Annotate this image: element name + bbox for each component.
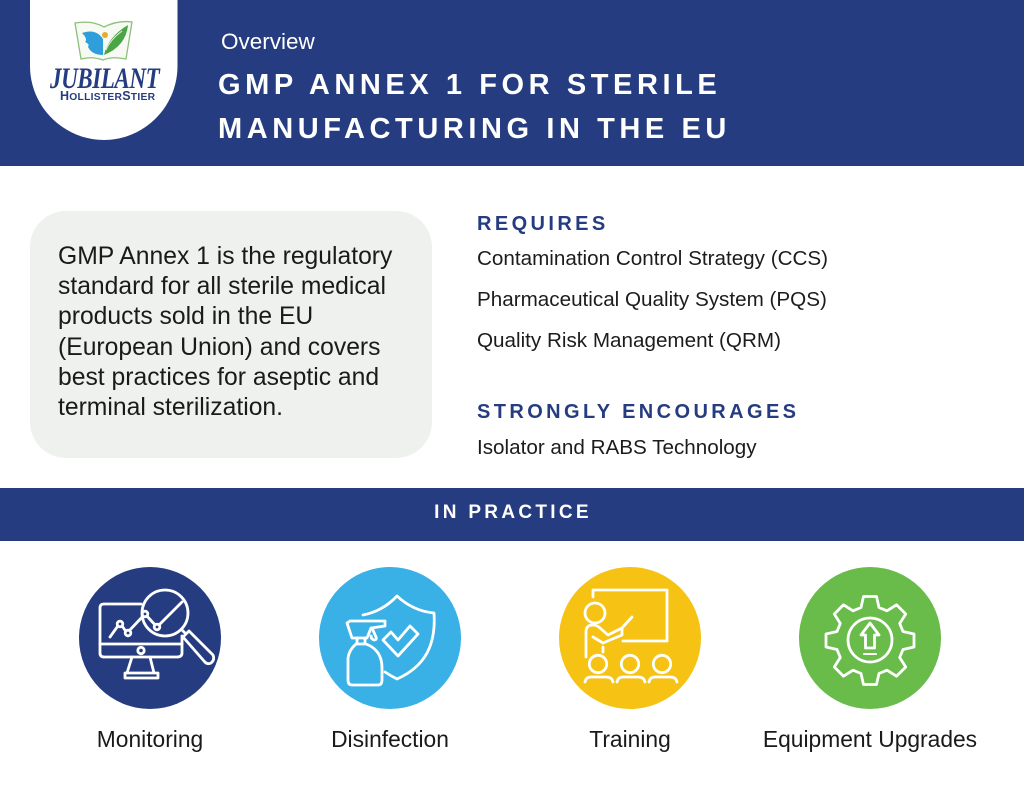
definition text: terminal sterilization. <box>58 394 283 421</box>
logo badge <box>30 0 178 140</box>
icon: monitoring <box>79 567 221 709</box>
label: training: Training <box>589 726 671 752</box>
logo butterfly <box>82 31 103 55</box>
heading: requires: REQUIRES <box>477 213 609 235</box>
definition text: (European Union) and covers <box>58 334 380 361</box>
logo wordmark: HOLLISTERSTIER <box>60 89 155 103</box>
icon: equipment upgrades <box>799 567 941 709</box>
icon: training <box>559 567 701 709</box>
requires item: PQS: Pharmaceutical Quality System (PQS) <box>477 288 827 310</box>
requires item: CCS: Contamination Control Strategy (CCS) <box>477 246 828 270</box>
label: disinfection: Disinfection <box>331 726 449 752</box>
band: in practice: IN PRACTICE <box>434 502 592 523</box>
logo wordmark: JUBILANT <box>50 62 159 95</box>
header band <box>0 0 1024 166</box>
definition text: GMP Annex 1 is the regulatory <box>58 243 392 270</box>
definition text <box>58 243 392 421</box>
title: MANUFACTURING IN THE EU <box>218 113 731 145</box>
overview label: Overview <box>221 28 315 54</box>
logo <box>30 0 178 140</box>
definition text: products sold in the EU <box>58 303 313 330</box>
title: GMP ANNEX 1 FOR STERILE <box>218 69 721 101</box>
title <box>218 69 731 145</box>
requires item: QRM: Quality Risk Management (QRM) <box>477 328 781 352</box>
heading: strongly encourages: STRONGLY ENCOURAGES <box>477 401 799 423</box>
label: equipment upgrades: Equipment Upgrades <box>763 726 977 752</box>
definition text: standard for all sterile medical <box>58 273 386 300</box>
encourages item: Isolator and RABS Technology <box>477 436 757 458</box>
icon: disinfection <box>319 567 461 709</box>
logo book <box>75 22 132 60</box>
panel: definition <box>30 211 432 458</box>
definition text: best practices for aseptic and <box>58 364 379 391</box>
band: in practice <box>0 488 1024 541</box>
label: monitoring: Monitoring <box>97 726 203 752</box>
